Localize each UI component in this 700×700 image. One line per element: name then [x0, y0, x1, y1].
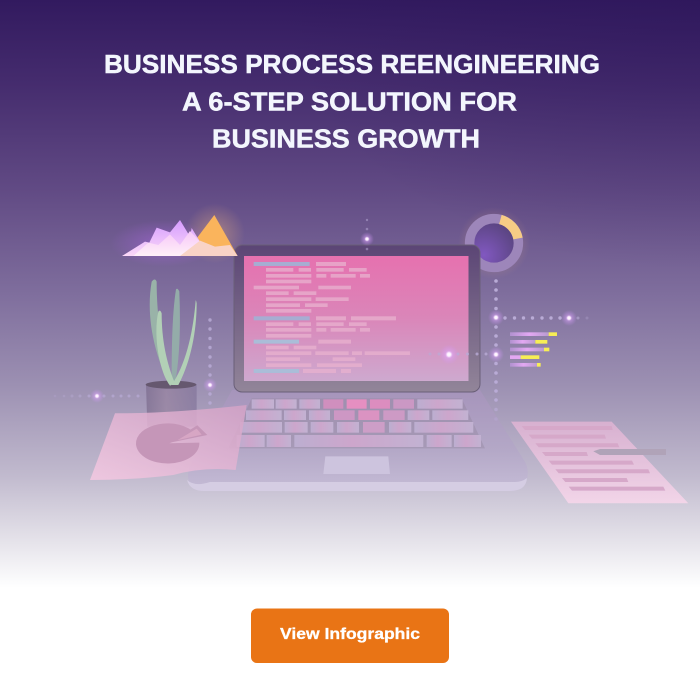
right paper with text lines — [511, 422, 688, 503]
vertical dots top — [366, 219, 368, 250]
glowing nodes — [90, 232, 577, 403]
title: A 6-STEP SOLUTION FOR — [182, 86, 517, 116]
trackpad — [323, 456, 390, 474]
laptop screen bezel — [234, 245, 480, 392]
plant pot — [146, 384, 197, 427]
horizontal bar chart — [510, 332, 557, 367]
icon: potted plant — [146, 279, 197, 427]
pencil — [593, 449, 666, 455]
keyboard — [228, 398, 485, 474]
button: view infographic — [251, 608, 449, 663]
horizontal dots left — [54, 394, 140, 398]
laptop — [187, 245, 528, 491]
icon: donut chart — [458, 207, 530, 279]
title: BUSINESS GROWTH — [212, 124, 480, 154]
title: BUSINESS PROCESS REENGINEERING — [104, 49, 600, 79]
vertical dots right — [494, 279, 498, 421]
pie chart — [136, 423, 207, 463]
title — [104, 49, 600, 154]
laptop screen — [244, 256, 468, 381]
vertical dots left — [208, 318, 212, 405]
laptop front lip — [187, 478, 527, 491]
connector dots — [54, 219, 588, 421]
laptop base — [188, 390, 528, 491]
icon: mountain chart — [110, 203, 245, 267]
left paper with pie chart — [90, 405, 247, 480]
horizontal dots right — [428, 316, 588, 356]
plant leaves — [150, 279, 197, 386]
button: view infographic: View Infographic — [280, 626, 420, 643]
screen code lines — [254, 262, 410, 373]
